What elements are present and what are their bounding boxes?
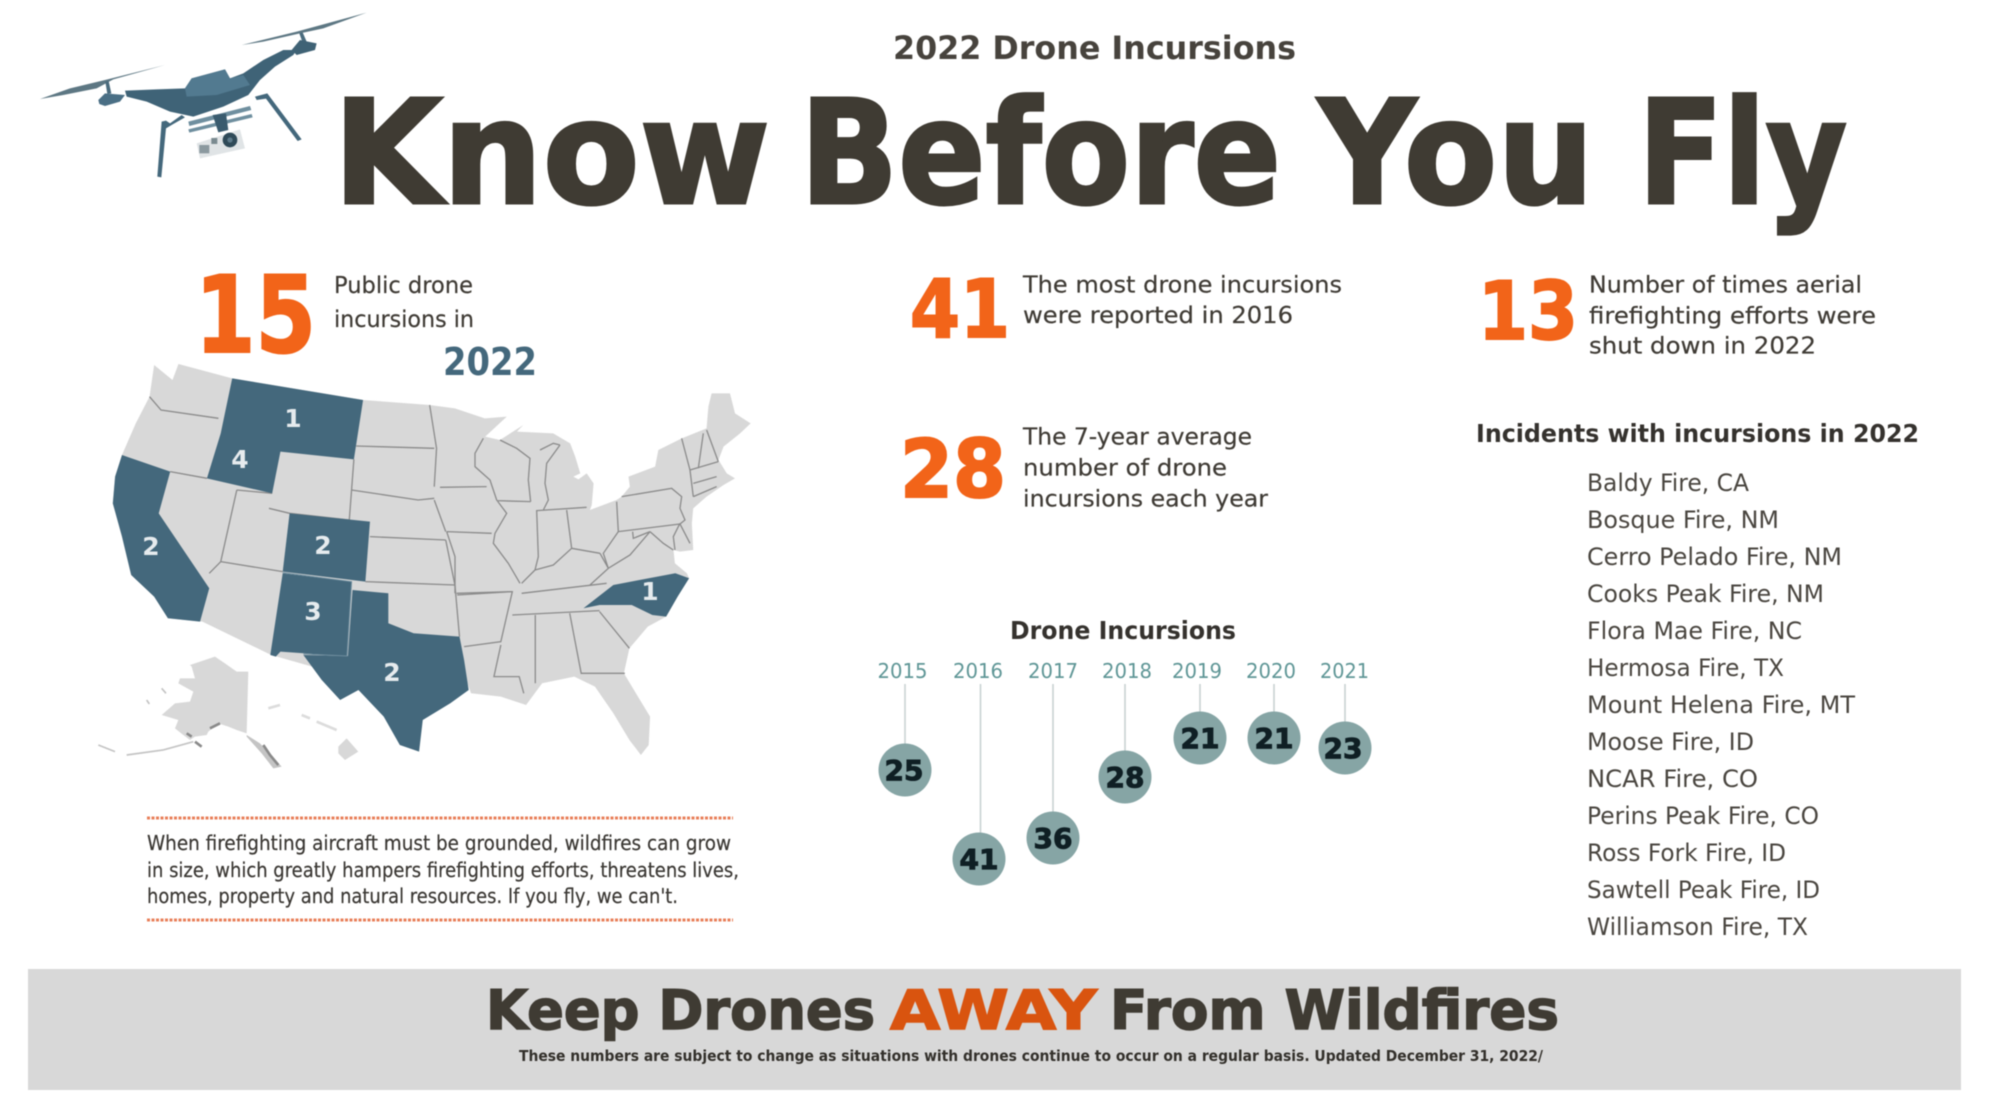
banner headline: From Wildfires <box>1110 979 1559 1042</box>
map: US states with incursions <box>98 364 751 768</box>
banner footnote: These numbers are subject to change as situations with drones continue to occur on a regular basis. Updated December 31, 2022/ <box>519 1047 1543 1065</box>
chart: Drone Incursions by year: 2016 <box>953 659 1003 683</box>
list: fires with incursions: Sawtell Peak Fire, ID <box>1587 876 1820 904</box>
callout: grounded aircraft warning: homes, property and natural resources. If you fly, we can't. <box>147 884 678 908</box>
callout: grounded aircraft warning <box>147 818 739 920</box>
list: fires with incursions: Flora Mae Fire, NC <box>1587 617 1802 645</box>
list: fires with incursions: NCAR Fire, CO <box>1587 765 1758 793</box>
map: US states with incursions: 1 <box>641 577 659 606</box>
stat: 15 public drone incursions in 2022: 15 <box>195 254 316 377</box>
chart: Drone Incursions by year: 28 <box>1106 761 1144 794</box>
icon: quadcopter drone <box>40 13 367 177</box>
state: New Mexico <box>270 573 352 657</box>
title: Know Before You Fly: Before <box>800 69 1281 237</box>
list: fires with incursions: Cooks Peak Fire, NM <box>1587 580 1824 608</box>
map inset: Alaska <box>98 657 282 768</box>
title: Know Before You Fly: Fly <box>1638 69 1847 237</box>
banner: grey footer band <box>28 969 1961 1090</box>
state: California <box>113 455 209 622</box>
chart: Drone Incursions by year: 2021 <box>1320 659 1369 683</box>
map: US states with incursions: 3 <box>304 597 322 626</box>
stat: 41 most incursions <box>910 263 1342 356</box>
stat: 41 most incursions: were reported in 2016 <box>1023 303 1293 329</box>
stat: 13 aerial shutdowns: firefighting efforts were <box>1589 304 1876 330</box>
map borders: midwest and northeast <box>440 430 718 593</box>
list: fires with incursions: Cerro Pelado Fire, NM <box>1587 543 1842 571</box>
stat: 28 seven-year average: incursions each year <box>1023 486 1269 512</box>
chart: Drone Incursions by year: 2019 <box>1172 659 1222 683</box>
list: fires with incursions: Hermosa Fire, TX <box>1587 654 1784 682</box>
stat: 41 most incursions: 41 <box>910 263 1010 356</box>
state: North Carolina <box>583 573 689 617</box>
list: fires with incursions: Bosque Fire, NM <box>1587 506 1779 534</box>
map: US states with incursions: 4 <box>231 445 249 474</box>
list: fires with incursions: Moose Fire, ID <box>1587 728 1754 756</box>
chart: Drone Incursions by year: 2020 <box>1246 659 1296 683</box>
state: Idaho and Montana <box>207 378 363 493</box>
map: US states with incursions: 2 <box>383 658 401 687</box>
chart: Drone Incursions by year: 2017 <box>1028 659 1078 683</box>
title: 2022 Drone Incursions: 2022 Drone Incursions <box>893 29 1296 67</box>
callout: grounded aircraft warning: When firefighting aircraft must be grounded, wildfires can grow <box>147 831 731 855</box>
stat: 28 seven-year average: 28 <box>900 423 1006 516</box>
chart: Drone Incursions by year: 2015 <box>878 659 928 683</box>
title: Know Before You Fly: Know <box>333 69 770 237</box>
list: fires with incursions: Perins Peak Fire, CO <box>1587 802 1819 830</box>
list: fires with incursions: Williamson Fire, TX <box>1587 913 1808 941</box>
stat: 13 aerial shutdowns: 13 <box>1478 265 1578 358</box>
stat: 15 public drone incursions in 2022: Public drone <box>334 273 473 299</box>
map inset: Hawaii <box>268 705 358 760</box>
chart: Drone Incursions by year: 23 <box>1324 732 1362 765</box>
chart: Drone Incursions by year: 41 <box>960 843 998 876</box>
stat: 15 public drone incursions in 2022 <box>195 254 537 384</box>
chart: Drone Incursions by year <box>878 616 1372 886</box>
chart: Drone Incursions by year: 25 <box>885 754 923 787</box>
stat: 28 seven-year average: The 7-year average <box>1022 424 1252 450</box>
chart: Drone Incursions by year: 21 <box>1181 722 1219 755</box>
title: Know Before You Fly <box>333 69 1847 237</box>
stat: 15 public drone incursions in 2022: incursions in <box>334 307 474 333</box>
stat: 13 aerial shutdowns: shut down in 2022 <box>1589 334 1816 360</box>
banner headline: AWAY <box>890 979 1098 1042</box>
title: Know Before You Fly: You <box>1316 69 1594 237</box>
chart heading: Drone Incursions <box>1010 616 1236 645</box>
stat: 28 seven-year average <box>900 423 1269 516</box>
state: Colorado <box>283 513 370 582</box>
map base: lower 48 states <box>113 364 751 755</box>
stat: 28 seven-year average: number of drone <box>1023 456 1227 482</box>
chart: Drone Incursions by year: 21 <box>1255 722 1293 755</box>
list: fires with incursions <box>1587 469 1855 941</box>
banner headline: Keep Drones <box>486 979 875 1042</box>
callout: grounded aircraft warning: in size, which greatly hampers firefighting efforts, threatens lives, <box>147 858 739 882</box>
map: US states with incursions: 2 <box>142 532 160 561</box>
stat: 41 most incursions: The most drone incursions <box>1022 272 1342 298</box>
chart: Drone Incursions by year: 36 <box>1034 822 1072 855</box>
list: fires with incursions: Mount Helena Fire, MT <box>1587 691 1855 719</box>
heading: incidents list: Incidents with incursions in 2022 <box>1476 419 1919 448</box>
banner headline <box>486 979 1559 1042</box>
map: US states with incursions: 1 <box>284 404 302 433</box>
stat: 13 aerial shutdowns: Number of times aerial <box>1589 272 1862 298</box>
stat: 13 aerial shutdowns <box>1478 265 1876 360</box>
chart: Drone Incursions by year: 2018 <box>1102 659 1152 683</box>
list: fires with incursions: Baldy Fire, CA <box>1587 469 1750 497</box>
map: US states with incursions: 2 <box>314 531 332 560</box>
stat: 15 public drone incursions in 2022: 2022 <box>443 340 537 384</box>
state: Texas <box>303 590 469 752</box>
list: fires with incursions: Ross Fork Fire, ID <box>1587 839 1786 867</box>
